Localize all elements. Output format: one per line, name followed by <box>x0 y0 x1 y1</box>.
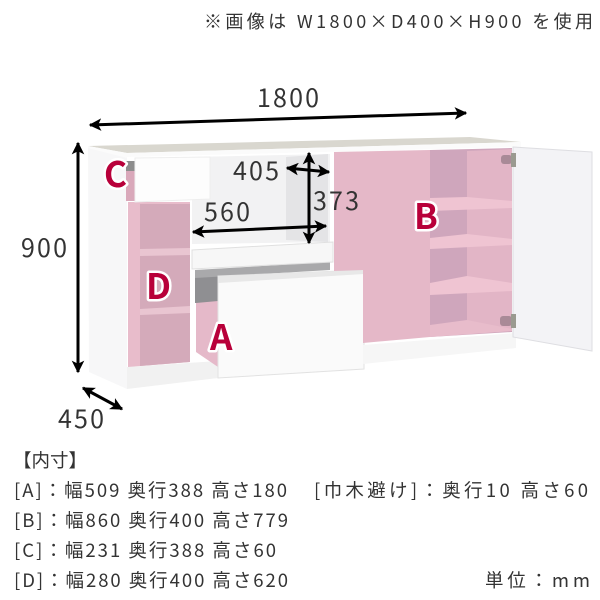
spec line C: [C]：幅231 奥行388 高さ60 <box>14 537 276 563</box>
plinth <box>363 333 516 364</box>
spec line B: [B]：幅860 奥行400 高さ779 <box>14 507 288 533</box>
label C: C <box>104 147 127 198</box>
cabinet top surface <box>88 137 521 153</box>
arrow: 560 <box>193 226 326 232</box>
drawer C <box>126 157 210 202</box>
drawer A front <box>218 270 364 378</box>
panel: shelf D <box>128 202 190 367</box>
note: image size: ※画像は W1800×D400×H900 を使用 <box>204 8 593 34</box>
label D: D <box>146 259 171 310</box>
label A: A <box>209 310 233 361</box>
arrow: width 1800 <box>90 113 466 125</box>
middle drawer <box>192 242 333 269</box>
dimension 373: 373 <box>313 182 359 218</box>
label B: B <box>414 189 438 240</box>
drawer A interior <box>196 301 218 367</box>
arrow: height 900 <box>76 143 80 372</box>
open door <box>513 147 592 351</box>
hinges <box>500 153 516 328</box>
dimension 405: 405 <box>233 152 279 188</box>
arrow: depth 450 <box>83 388 122 409</box>
panel: open centre compartment <box>192 154 330 303</box>
dimension 900: 900 <box>21 229 67 265</box>
dimension 450: 450 <box>58 400 104 436</box>
dimension 1800: 1800 <box>257 79 319 115</box>
spec line D: [D]：幅280 奥行400 高さ620 <box>14 567 288 593</box>
cabinet illustration <box>88 137 592 389</box>
arrow: 405 <box>287 168 329 172</box>
panel: open shelves B <box>430 148 512 337</box>
heading: interior dimensions: 【内寸】 <box>13 447 87 473</box>
spec line baseboard clearance: [巾木避け]：奥行10 高さ60 <box>314 477 588 503</box>
arrow: 373 <box>308 153 310 243</box>
spec line A: [A]：幅509 奥行388 高さ180 <box>14 477 287 503</box>
cabinet left side <box>88 148 127 389</box>
dimension 560: 560 <box>204 193 250 229</box>
panel: door B <box>334 150 430 343</box>
cabinet front frame <box>127 147 516 389</box>
unit: 単位：mm <box>485 567 590 593</box>
